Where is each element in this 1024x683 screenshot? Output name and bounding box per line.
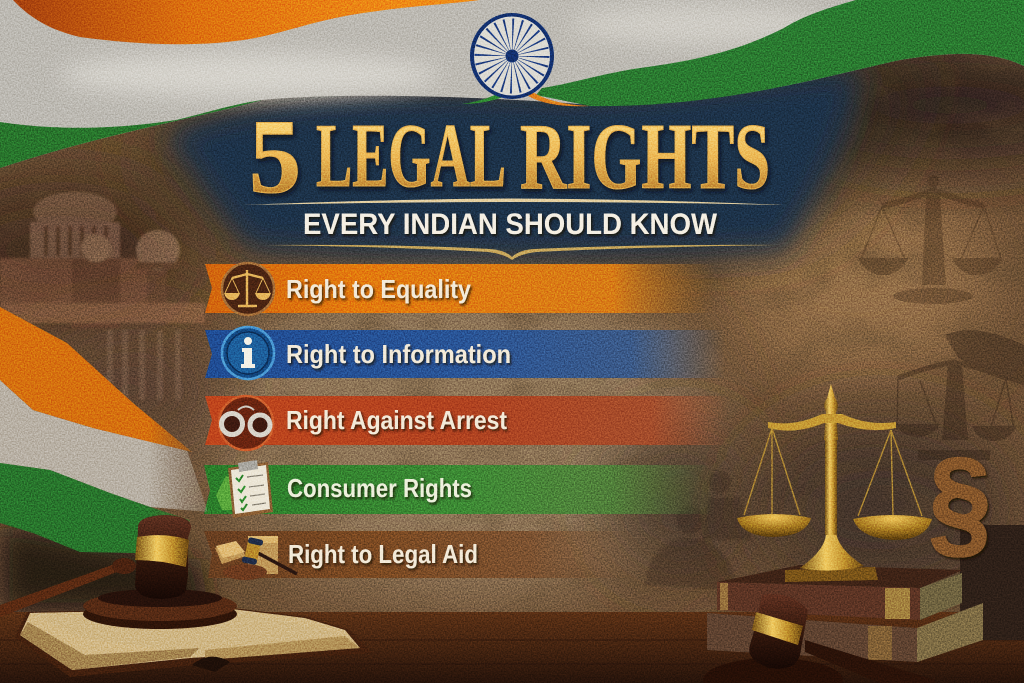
bottom book — [707, 603, 983, 662]
icon: checklist clipboard — [228, 460, 273, 518]
green ribbon under wheel — [462, 86, 516, 104]
flag white band — [0, 0, 1024, 168]
gavel handle — [0, 565, 117, 617]
open book — [15, 608, 372, 677]
title: RIGHTS — [520, 105, 770, 209]
icon: information — [222, 327, 274, 379]
label: Right to Equality — [286, 274, 471, 304]
gavel: right — [703, 594, 935, 683]
upper gold rule — [243, 198, 783, 205]
gold band — [135, 535, 189, 567]
subtitle: EVERY INDIAN SHOULD KNOW — [303, 208, 718, 241]
gavel head — [135, 515, 191, 599]
label: Right to Information — [286, 339, 511, 369]
icon: scales of justice — [222, 263, 274, 315]
ribbon band orange — [205, 264, 715, 313]
ribbon band blue — [205, 330, 725, 378]
icon: handcuffs — [219, 396, 273, 450]
flag white band left — [0, 380, 208, 512]
title: LEGAL — [316, 105, 506, 206]
ribbon: Consumer Rights — [204, 460, 715, 518]
faded court building silhouette — [0, 192, 205, 400]
books stack behind right — [960, 525, 1024, 640]
left pan — [737, 514, 811, 537]
dark halo around title backdrop — [120, 60, 920, 248]
gavel neck — [112, 558, 136, 574]
flag orange band left — [0, 307, 192, 452]
ribbon: Right to Information — [205, 327, 725, 379]
lower gold rule with notch — [265, 245, 776, 260]
wooden table — [0, 612, 1024, 683]
flag green left band — [0, 100, 262, 168]
orange ribbon under wheel — [528, 90, 590, 106]
title: 5 — [249, 98, 301, 215]
handle right — [805, 640, 935, 683]
gavel head right — [749, 594, 808, 669]
finial — [824, 384, 838, 440]
law section symbol: § — [929, 433, 991, 569]
icon: Ashoka Chakra — [470, 13, 554, 99]
flag: left side — [0, 307, 208, 556]
flag green band left — [0, 463, 190, 556]
flag orange band — [13, 0, 480, 44]
flag: top banner — [0, 0, 1024, 168]
chains — [744, 428, 922, 516]
ribbon: Right to Legal Aid — [204, 531, 640, 580]
ribbon band green — [204, 465, 715, 514]
ribbon: Right to Equality — [205, 263, 715, 315]
base — [800, 530, 864, 571]
label: Right Against Arrest — [286, 405, 507, 435]
ribbon band brown — [204, 531, 640, 578]
faded people silhouettes — [645, 471, 752, 590]
faded scales silhouette: upper right — [858, 175, 1002, 304]
beam — [768, 414, 896, 431]
ribbon band red — [205, 396, 730, 445]
ribbon: Right Against Arrest — [205, 396, 730, 450]
dark corner below left flag — [0, 525, 210, 612]
book stack — [707, 565, 983, 662]
title — [249, 98, 770, 215]
gavel: left — [0, 515, 237, 629]
faded scales silhouette: lower right with hand — [896, 330, 1024, 460]
brass scales — [737, 384, 932, 582]
flag green right band — [536, 0, 1024, 106]
pillar — [825, 440, 837, 535]
label: Consumer Rights — [287, 473, 472, 503]
gold band right — [752, 612, 803, 645]
icon: books and gavel — [215, 536, 297, 580]
sound block — [83, 599, 237, 629]
navy title backdrop — [165, 70, 860, 258]
right pan — [853, 515, 932, 540]
icon: leaf accent — [216, 476, 234, 510]
plinth — [785, 567, 878, 582]
label: Right to Legal Aid — [288, 539, 478, 569]
top book — [717, 565, 963, 588]
sound block right — [703, 658, 843, 683]
